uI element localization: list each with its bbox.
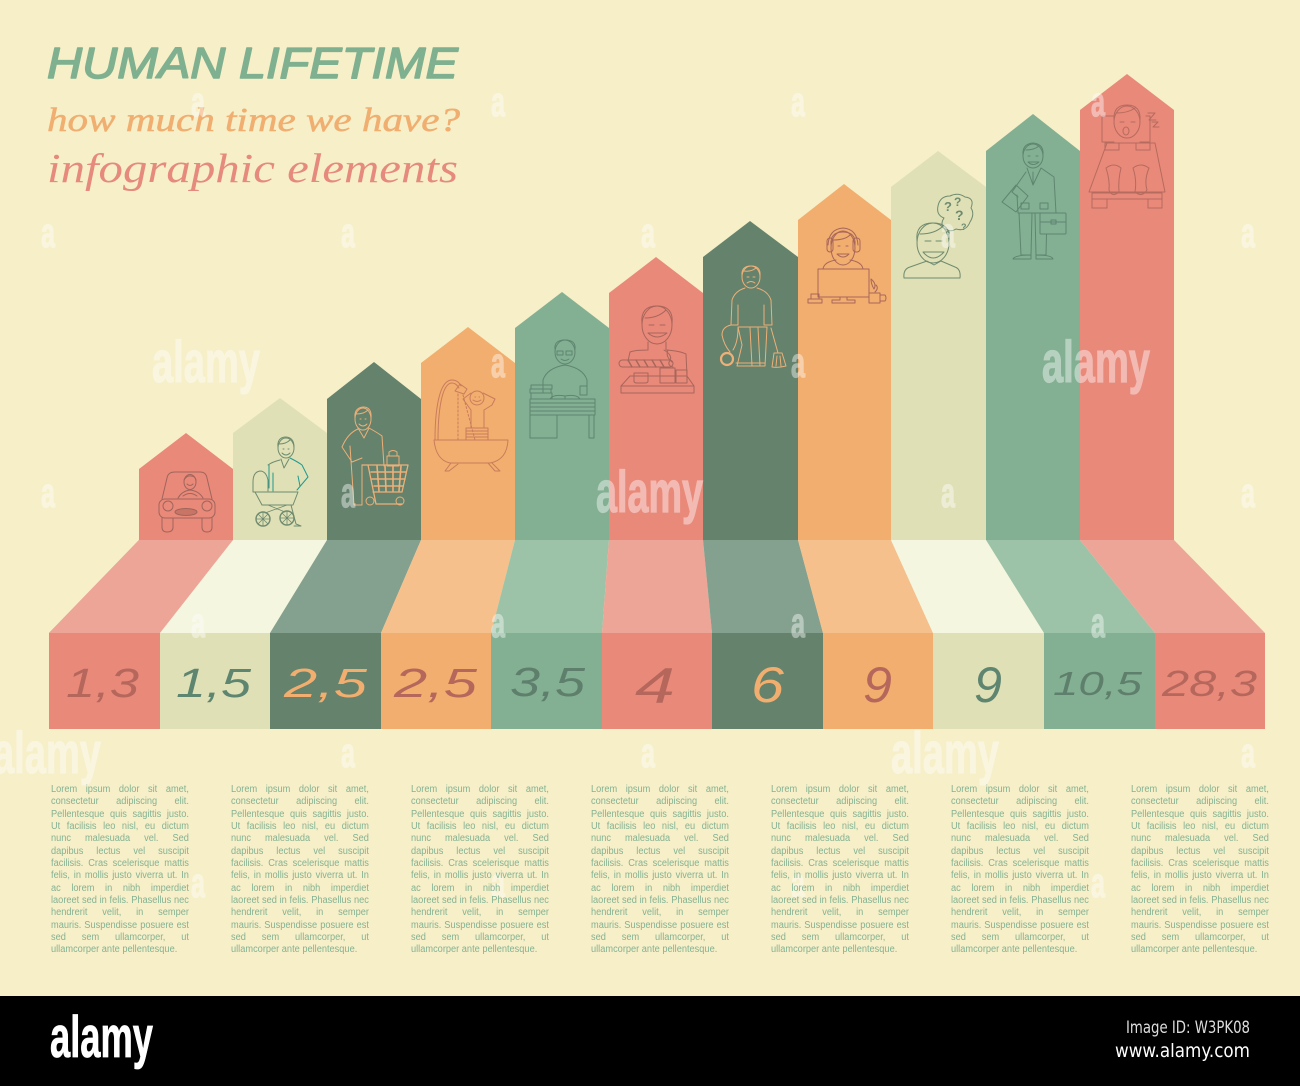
- text block 3: facilisis. Cras scelerisque mattis: [411, 858, 549, 869]
- text block 5: Pellentesque quis sagittis justo.: [771, 809, 909, 820]
- text block 7: Ut facilisis leo nisl, eu dictum: [1131, 821, 1269, 832]
- watermark letters: a: [191, 859, 205, 906]
- text block 7: mauris. Suspendisse posuere est: [1131, 920, 1269, 931]
- text block 3: mauris. Suspendisse posuere est: [411, 920, 549, 931]
- watermark letters: [41, 78, 1255, 906]
- text block 2: dapibus lectus vel suscipit: [231, 846, 369, 857]
- watermark letters: a: [1241, 469, 1255, 516]
- text block 4: Pellentesque quis sagittis justo.: [591, 809, 729, 820]
- text block 3: Ut facilisis leo nisl, eu dictum: [411, 821, 549, 832]
- text block 7: hendrerit velit, in semper: [1131, 907, 1269, 918]
- text block 2: felis, in mollis justo viverra ut. In: [231, 870, 369, 881]
- text block 5: ullamcorper ante pellentesque.: [771, 944, 897, 955]
- icon: thinking man with question cloud: ?: [944, 199, 952, 214]
- arrow 9: [891, 151, 1044, 729]
- icon: cleaner man with broom: [721, 266, 786, 367]
- text block 2: mauris. Suspendisse posuere est: [231, 920, 369, 931]
- watermark letters: a: [941, 209, 955, 256]
- watermark letters: a: [641, 729, 655, 776]
- value 10,5: 10,5: [1053, 665, 1143, 702]
- text block 4: laoreet sed in felis. Phasellus nec: [591, 895, 729, 906]
- text block 4: consectetur adipiscing elit.: [591, 796, 729, 807]
- text block 2: laoreet sed in felis. Phasellus nec: [231, 895, 369, 906]
- value 4: 4: [635, 658, 675, 714]
- value 2,5: 2,5: [393, 660, 477, 706]
- text block 5: facilisis. Cras scelerisque mattis: [771, 858, 909, 869]
- icon: businessman with briefcase: [1002, 143, 1066, 259]
- text block 6: Ut facilisis leo nisl, eu dictum: [951, 821, 1089, 832]
- value 1,5: 1,5: [176, 660, 251, 706]
- text block 6: ac lorem in nibh imperdiet: [951, 883, 1089, 894]
- footer logo: alamy: [50, 1005, 153, 1070]
- text block 6: felis, in mollis justo viverra ut. In: [951, 870, 1089, 881]
- watermark letters: a: [941, 469, 955, 516]
- text block 7: [1131, 784, 1269, 955]
- text block 6: Pellentesque quis sagittis justo.: [951, 809, 1089, 820]
- text block 3: sed sem ullamcorper, ut: [411, 932, 549, 943]
- footer bar: [0, 996, 1300, 1086]
- watermark letters: a: [791, 339, 805, 386]
- text block 5: [771, 784, 909, 955]
- text block 7: dapibus lectus vel suscipit: [1131, 846, 1269, 857]
- text block 5: laoreet sed in felis. Phasellus nec: [771, 895, 909, 906]
- text block 1: hendrerit velit, in semper: [51, 907, 189, 918]
- text block 1: ullamcorper ante pellentesque.: [51, 944, 177, 955]
- text block 1: facilisis. Cras scelerisque mattis: [51, 858, 189, 869]
- arrow chart: [49, 74, 1265, 729]
- text block 7: felis, in mollis justo viverra ut. In: [1131, 870, 1269, 881]
- icon: man with shopping cart: [342, 407, 408, 505]
- watermarks: [0, 78, 1255, 906]
- text block 5: dapibus lectus vel suscipit: [771, 846, 909, 857]
- text block 2: Ut facilisis leo nisl, eu dictum: [231, 821, 369, 832]
- text block 7: facilisis. Cras scelerisque mattis: [1131, 858, 1269, 869]
- icon: man reading at desk: [530, 340, 595, 438]
- subtitle: infographic elements: infographic elements: [47, 145, 458, 191]
- text block 4: felis, in mollis justo viverra ut. In: [591, 870, 729, 881]
- footer url: www.alamy.com: [1115, 1040, 1250, 1062]
- text block 5: consectetur adipiscing elit.: [771, 796, 909, 807]
- text block 3: Pellentesque quis sagittis justo.: [411, 809, 549, 820]
- text block 2: Lorem ipsum dolor sit amet,: [231, 784, 369, 795]
- text block 3: nunc malesuada vel. Sed: [411, 833, 549, 844]
- watermark letters: a: [791, 859, 805, 906]
- text block 3: ac lorem in nibh imperdiet: [411, 883, 549, 894]
- watermark letters: a: [491, 78, 505, 125]
- text block 6: consectetur adipiscing elit.: [951, 796, 1089, 807]
- value 6: 6: [751, 657, 784, 713]
- text block 2: consectetur adipiscing elit.: [231, 796, 369, 807]
- watermark letters: a: [341, 469, 355, 516]
- text block 4: Ut facilisis leo nisl, eu dictum: [591, 821, 729, 832]
- text block 2: facilisis. Cras scelerisque mattis: [231, 858, 369, 869]
- text block 4: hendrerit velit, in semper: [591, 907, 729, 918]
- text block 2: nunc malesuada vel. Sed: [231, 833, 369, 844]
- text block 6: mauris. Suspendisse posuere est: [951, 920, 1089, 931]
- icon: man in bathtub shower: [434, 380, 508, 471]
- watermark letters: a: [1241, 209, 1255, 256]
- value labels: [66, 657, 1257, 714]
- text block 1: laoreet sed in felis. Phasellus nec: [51, 895, 189, 906]
- text block 5: Ut facilisis leo nisl, eu dictum: [771, 821, 909, 832]
- value 9: 9: [974, 657, 1002, 713]
- text block 5: Lorem ipsum dolor sit amet,: [771, 784, 909, 795]
- icon: thinking man with question cloud: ?: [961, 222, 966, 232]
- text block 6: hendrerit velit, in semper: [951, 907, 1089, 918]
- icon: man with stroller: [253, 437, 308, 526]
- watermark letters: a: [341, 729, 355, 776]
- icon: man driving car: [159, 472, 215, 532]
- watermark word: alamy: [1042, 330, 1150, 395]
- text block 2: ullamcorper ante pellentesque.: [231, 944, 357, 955]
- text block 5: ac lorem in nibh imperdiet: [771, 883, 909, 894]
- arrow 5: [491, 292, 609, 729]
- text block 1: consectetur adipiscing elit.: [51, 796, 189, 807]
- text block 3: ullamcorper ante pellentesque.: [411, 944, 537, 955]
- text block 2: Pellentesque quis sagittis justo.: [231, 809, 369, 820]
- watermark word: alamy: [891, 721, 999, 786]
- text block 1: Pellentesque quis sagittis justo.: [51, 809, 189, 820]
- text block 7: ac lorem in nibh imperdiet: [1131, 883, 1269, 894]
- text block 1: ac lorem in nibh imperdiet: [51, 883, 189, 894]
- text block 3: dapibus lectus vel suscipit: [411, 846, 549, 857]
- text block 3: laoreet sed in felis. Phasellus nec: [411, 895, 549, 906]
- watermark letters: a: [1241, 729, 1255, 776]
- text block 6: sed sem ullamcorper, ut: [951, 932, 1089, 943]
- text block 5: nunc malesuada vel. Sed: [771, 833, 909, 844]
- value 3,5: 3,5: [510, 659, 585, 705]
- text block 5: mauris. Suspendisse posuere est: [771, 920, 909, 931]
- watermark letters: a: [1091, 599, 1105, 646]
- text block 6: Lorem ipsum dolor sit amet,: [951, 784, 1089, 795]
- text block 2: sed sem ullamcorper, ut: [231, 932, 369, 943]
- subtitle: how much time: how much time we have?: [47, 102, 460, 139]
- icon: man with baguette and coffee: [619, 306, 694, 393]
- text block 7: Pellentesque quis sagittis justo.: [1131, 809, 1269, 820]
- text block 2: hendrerit velit, in semper: [231, 907, 369, 918]
- watermark letters: a: [791, 78, 805, 125]
- text block 3: hendrerit velit, in semper: [411, 907, 549, 918]
- arrow 7: [703, 221, 823, 729]
- watermark letters: a: [491, 859, 505, 906]
- text block 6: nunc malesuada vel. Sed: [951, 833, 1089, 844]
- text block 7: sed sem ullamcorper, ut: [1131, 932, 1269, 943]
- watermark letters: a: [41, 209, 55, 256]
- icon: thinking man with question cloud: ?: [954, 195, 961, 209]
- watermark word: alamy: [152, 330, 260, 395]
- footer image id: Image ID: W3PK08: [1126, 1018, 1250, 1038]
- text block 1: nunc malesuada vel. Sed: [51, 833, 189, 844]
- text block 1: sed sem ullamcorper, ut: [51, 932, 189, 943]
- watermark letters: a: [41, 469, 55, 516]
- icon: man sleeping in bed: [1089, 105, 1165, 208]
- arrow 1: [49, 433, 233, 729]
- text block 6: dapibus lectus vel suscipit: [951, 846, 1089, 857]
- text block 4: sed sem ullamcorper, ut: [591, 932, 729, 943]
- arrow 6: [602, 257, 712, 729]
- arrow 2: [160, 398, 327, 729]
- watermark letters: a: [491, 599, 505, 646]
- arrow 4: [381, 327, 515, 729]
- text block 3: felis, in mollis justo viverra ut. In: [411, 870, 549, 881]
- text block 1: dapibus lectus vel suscipit: [51, 846, 189, 857]
- title: human lifetime: HUMAN LIFETIME: [47, 39, 459, 88]
- text block 4: mauris. Suspendisse posuere est: [591, 920, 729, 931]
- text block 5: hendrerit velit, in semper: [771, 907, 909, 918]
- arrow 10: [986, 114, 1155, 729]
- text block 2: [231, 784, 369, 955]
- value 1,3: 1,3: [66, 660, 139, 706]
- title block: [47, 39, 460, 191]
- text block 4: ullamcorper ante pellentesque.: [591, 944, 717, 955]
- watermark letters: a: [1091, 859, 1105, 906]
- text block 4: nunc malesuada vel. Sed: [591, 833, 729, 844]
- text block 6: [951, 784, 1089, 955]
- watermark letters: a: [191, 599, 205, 646]
- watermark letters: a: [1091, 78, 1105, 125]
- text block 4: dapibus lectus vel suscipit: [591, 846, 729, 857]
- text block 3: consectetur adipiscing elit.: [411, 796, 549, 807]
- arrow 8: [798, 184, 933, 729]
- text block 1: mauris. Suspendisse posuere est: [51, 920, 189, 931]
- watermark word: alamy: [596, 460, 703, 525]
- watermark letters: a: [341, 209, 355, 256]
- text block 4: facilisis. Cras scelerisque mattis: [591, 858, 729, 869]
- text block 4: ac lorem in nibh imperdiet: [591, 883, 729, 894]
- text block 7: ullamcorper ante pellentesque.: [1131, 944, 1257, 955]
- text block 3: Lorem ipsum dolor sit amet,: [411, 784, 549, 795]
- watermark letters: a: [641, 209, 655, 256]
- text block 6: laoreet sed in felis. Phasellus nec: [951, 895, 1089, 906]
- icon: thinking man with question cloud: [904, 194, 973, 278]
- text block 3: [411, 784, 549, 955]
- watermark letters: a: [491, 339, 505, 386]
- text block 2: ac lorem in nibh imperdiet: [231, 883, 369, 894]
- text block 7: laoreet sed in felis. Phasellus nec: [1131, 895, 1269, 906]
- watermark letters: a: [191, 78, 205, 125]
- watermark letters: a: [791, 599, 805, 646]
- arrow 3: [270, 362, 421, 729]
- arrow 11: [1080, 74, 1265, 729]
- text block 4: [591, 784, 729, 955]
- icon: call centre operator: [808, 228, 886, 303]
- value 2,5: 2,5: [283, 660, 367, 706]
- text block 5: felis, in mollis justo viverra ut. In: [771, 870, 909, 881]
- text block 7: Lorem ipsum dolor sit amet,: [1131, 784, 1269, 795]
- text block 1: Ut facilisis leo nisl, eu dictum: [51, 821, 189, 832]
- value 28,3: 28,3: [1161, 663, 1257, 704]
- text block 4: Lorem ipsum dolor sit amet,: [591, 784, 729, 795]
- text block 1: Lorem ipsum dolor sit amet,: [51, 784, 189, 795]
- text block 5: sed sem ullamcorper, ut: [771, 932, 909, 943]
- text block 6: ullamcorper ante pellentesque.: [951, 944, 1077, 955]
- text block 1: [51, 784, 189, 955]
- value 9: 9: [863, 657, 892, 713]
- text block 7: consectetur adipiscing elit.: [1131, 796, 1269, 807]
- icon: thinking man with question cloud: ?: [955, 207, 964, 223]
- text block 7: nunc malesuada vel. Sed: [1131, 833, 1269, 844]
- text block 6: facilisis. Cras scelerisque mattis: [951, 858, 1089, 869]
- text block 1: felis, in mollis justo viverra ut. In: [51, 870, 189, 881]
